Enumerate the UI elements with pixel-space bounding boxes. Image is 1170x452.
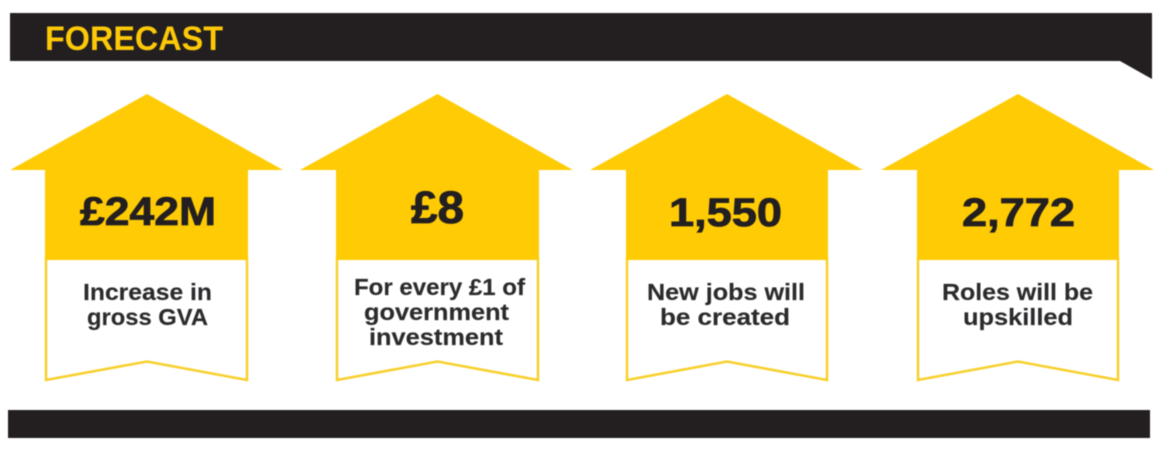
description: Increase in [83, 279, 212, 305]
description: government [364, 299, 509, 325]
arrow label body [337, 258, 538, 380]
description [942, 279, 1093, 330]
arrow head [10, 94, 283, 260]
arrow label body [918, 258, 1118, 380]
description [647, 279, 805, 330]
description: New jobs will [647, 279, 805, 305]
figure: 2,772 [962, 191, 1075, 235]
description: For every £1 of [354, 274, 525, 300]
panel: roles upskilled [881, 94, 1154, 380]
arrow head [300, 94, 573, 260]
arrow head [881, 94, 1154, 260]
header banner [10, 13, 1152, 79]
description: gross GVA [87, 304, 208, 330]
description: Roles will be [942, 279, 1093, 305]
arrow label body [627, 258, 827, 380]
description: upskilled [963, 304, 1073, 330]
panel: return on government investment [300, 94, 573, 380]
figure: £242M [80, 190, 216, 234]
heading: forecast: FORECAST [45, 20, 223, 58]
panel: increase in gross GVA [10, 94, 283, 380]
description: investment [369, 324, 503, 350]
description [83, 279, 212, 330]
arrow head [590, 94, 863, 260]
description: be created [660, 304, 790, 330]
footer bar [8, 410, 1150, 438]
figure: 1,550 [669, 191, 782, 235]
arrow label body [46, 258, 247, 380]
description [354, 274, 525, 350]
figure: £8 [411, 182, 464, 233]
panel: new jobs [590, 94, 863, 380]
